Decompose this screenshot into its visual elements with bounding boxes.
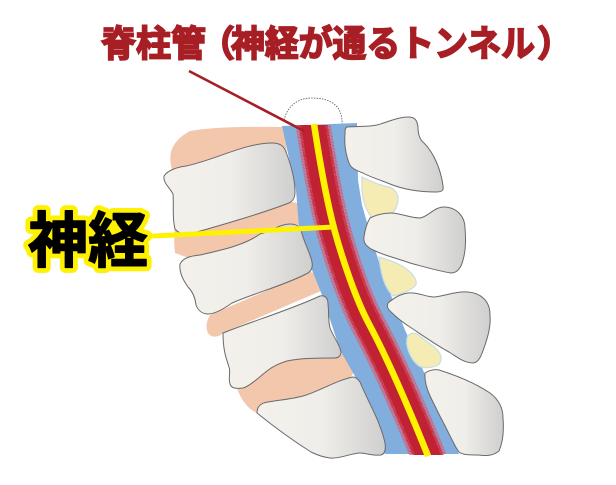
spinous process 1: [345, 117, 443, 192]
title: spinal canal: ）: [537, 23, 573, 64]
vertebra 4: [257, 377, 385, 458]
title: spinal canal: （: [199, 23, 235, 64]
canal leader line: [189, 71, 304, 131]
intervertebral discs: [170, 127, 353, 413]
spinal canal (blue): [282, 123, 459, 454]
vertebra 3: [223, 296, 341, 388]
label: nerve: 神経: [28, 208, 148, 275]
nerve leader line: [154, 227, 334, 236]
spinous process 3: [387, 292, 490, 363]
spinous process 2: [364, 207, 466, 273]
title: spinal canal: [101, 23, 573, 64]
spinal cord (red hatched nerve bundle): [312, 118, 430, 460]
vertebrae left column: [164, 143, 385, 458]
title: spinal canal: 神経が通るトンネル: [231, 23, 535, 64]
vertebra 1: [164, 143, 295, 234]
title: spinal canal: 脊柱管: [101, 23, 206, 64]
spine diagram infographic: [23, 24, 550, 459]
central nerve (yellow): [314, 124, 428, 456]
vertebrae right column: [345, 117, 503, 456]
yellow ligament blobs: [362, 177, 441, 368]
label: nerve: 神経: [28, 208, 148, 275]
vertebra 2: [180, 224, 312, 314]
spinous process 4: [425, 370, 503, 456]
dotted arc outline: [284, 98, 342, 124]
